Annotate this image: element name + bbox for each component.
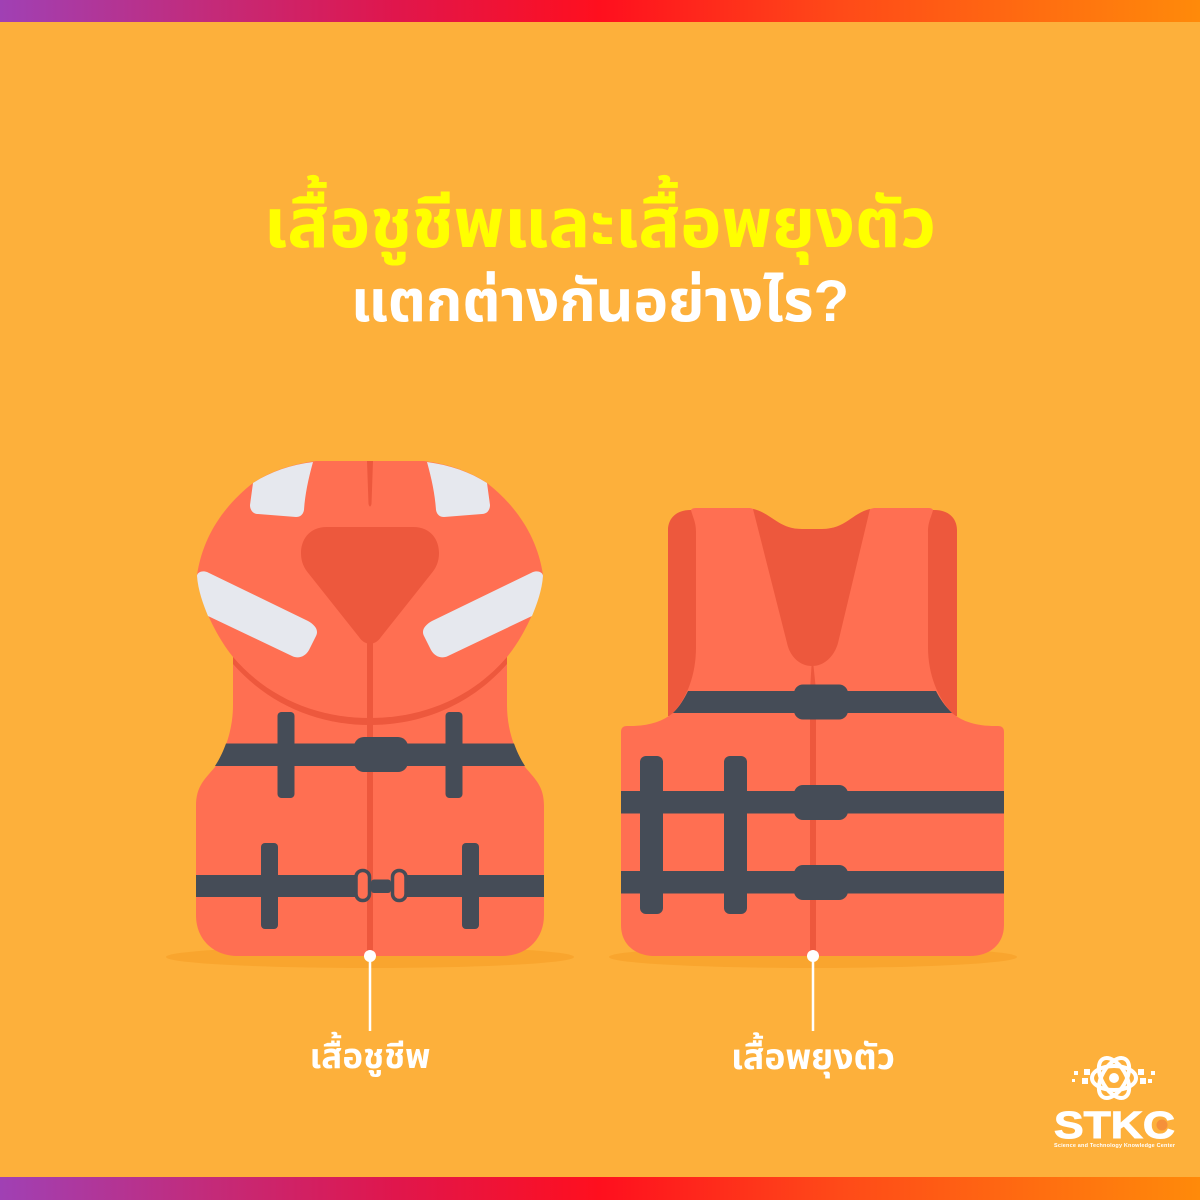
logo accent dot [1156,1120,1168,1130]
title line 2: แตกต่างกันอย่างไร? [351,269,849,334]
title [264,174,936,334]
pointer: life jacket [364,950,376,1031]
buoyancy vest illustration [609,508,1017,968]
centre seam [367,461,373,956]
upper strap [215,744,525,766]
front panels [673,508,952,730]
ground shadow [609,946,1017,968]
neck opening [753,509,870,666]
reflective patches [197,462,543,657]
centre seam [810,666,816,956]
collar [197,461,543,718]
title line 1: เสื้อชูชีพและเสื้อพยุงตัว [264,184,936,262]
atom mark [1092,1053,1136,1103]
label: buoyancy vest: เสื้อพยุงตัว [731,1037,895,1077]
lower body [196,650,544,956]
lower strap and buckle [196,843,544,929]
lower straps [621,756,1004,914]
bottom gradient bar [0,1177,1200,1200]
top gradient bar [0,0,1200,22]
logo dots [1072,1069,1155,1084]
top buckle [794,684,848,720]
upper buckle [354,737,408,772]
pointer: buoyancy vest [807,950,819,1031]
upper vertical straps [278,712,462,798]
neck opening [301,527,439,644]
STKC logo [1054,1053,1176,1149]
label: life jacket: เสื้อชูชีพ [310,1037,430,1076]
back panels [668,510,957,716]
lower body [621,713,1004,956]
logo tagline: Science and Technology Knowledge Center [1054,1143,1176,1149]
logo wordmark: STKC [1054,1105,1175,1147]
top strap [673,691,952,713]
life jacket illustration [166,461,574,968]
ground shadow [166,946,574,968]
collar arc [233,640,507,725]
